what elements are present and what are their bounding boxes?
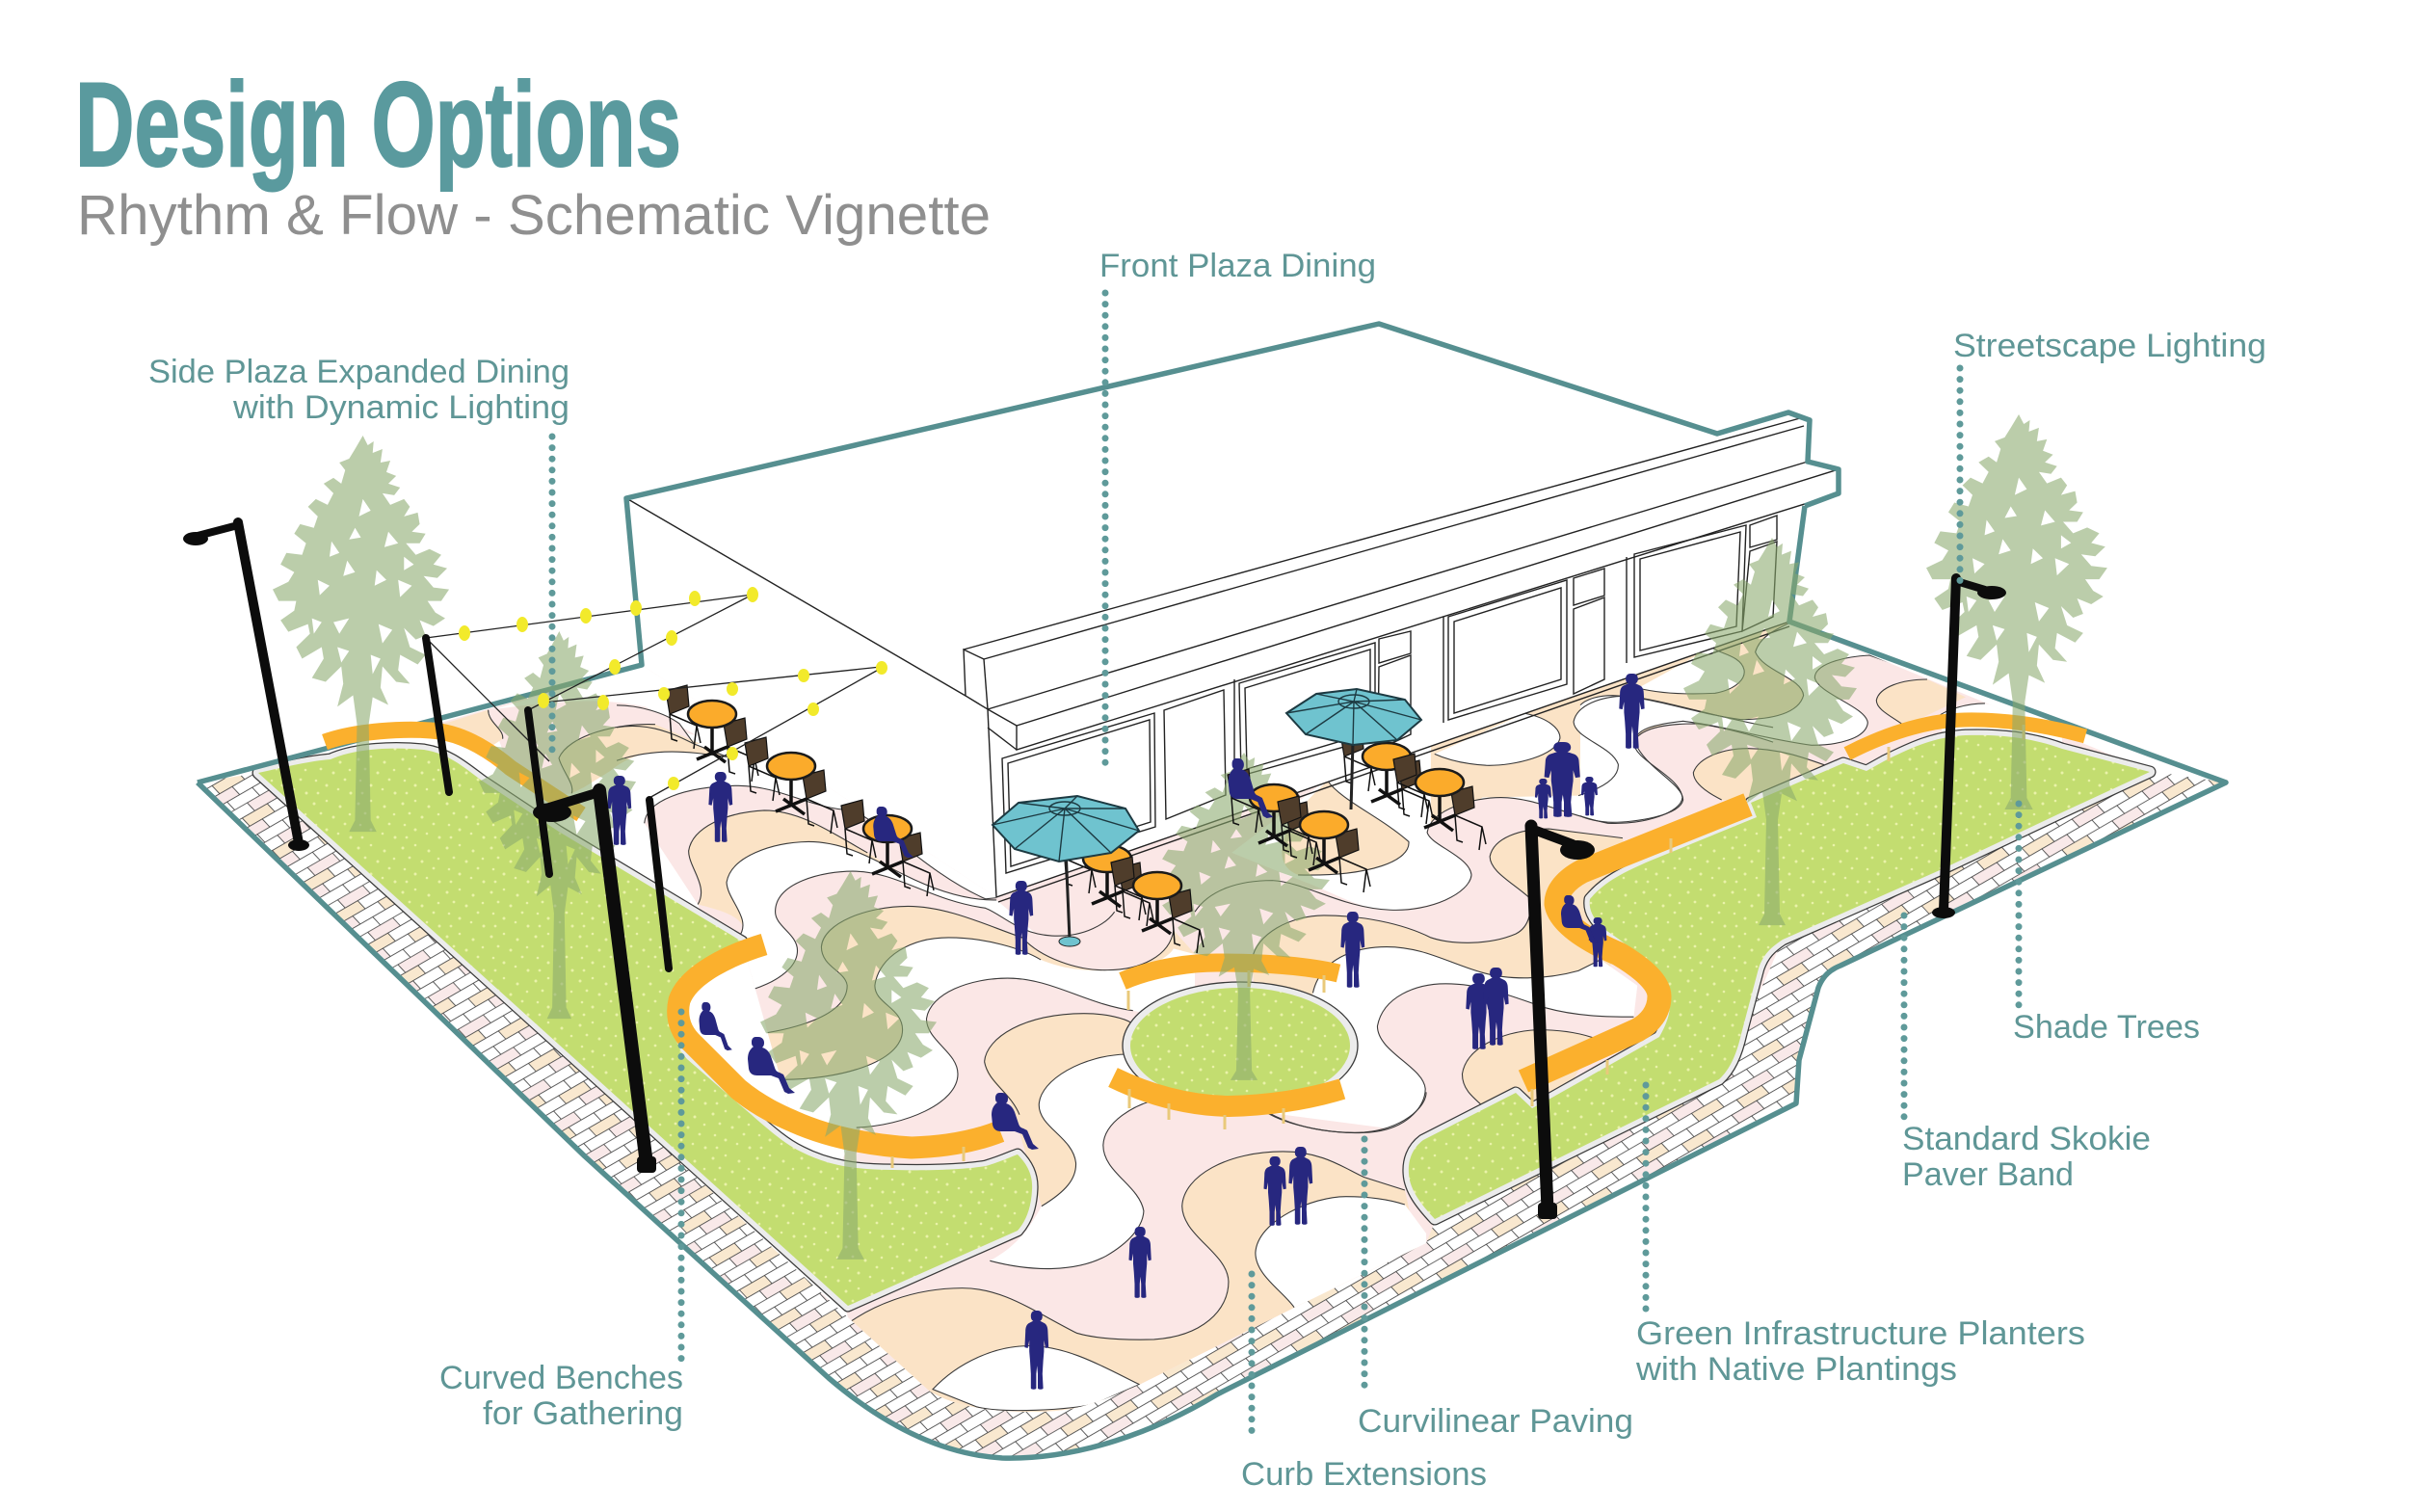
label: side plaza: with Dynamic Lighting	[232, 389, 569, 426]
label: shade trees: Shade Trees	[2013, 1009, 2200, 1046]
shade trees	[273, 414, 2107, 1260]
bench: side plaza back	[325, 729, 581, 814]
bench: circle top	[1123, 963, 1338, 981]
lamp: left front	[533, 790, 656, 1173]
label: paver band: Standard Skokie	[1902, 1121, 2151, 1157]
bench legs	[892, 725, 2024, 1168]
label: side plaza	[148, 354, 569, 752]
label: paver band	[1902, 915, 2151, 1193]
label: curved benches	[439, 1012, 683, 1432]
teal site and building outline	[198, 324, 2226, 1458]
tree: right planter	[1683, 538, 1857, 925]
building	[626, 418, 1839, 902]
paver band	[198, 771, 2226, 1458]
bench: circle bottom	[1113, 1077, 1342, 1106]
label: curb extensions: Curb Extensions	[1241, 1456, 1487, 1493]
label: streetscape lighting: Streetscape Lighting	[1953, 328, 2266, 364]
label: green infrastructure: Green Infrastructure Planters	[1636, 1315, 2085, 1352]
tree: front plaza left	[760, 871, 937, 1260]
tree: back left	[273, 436, 449, 832]
label: paver band: Paver Band	[1902, 1156, 2074, 1193]
benches	[325, 720, 2085, 1168]
planter: left green infrastructure	[258, 749, 1032, 1306]
label: green infrastructure: with Native Plantings	[1635, 1351, 1957, 1388]
title: Design Options	[75, 59, 681, 192]
plaza curvilinear paving	[442, 623, 2112, 1412]
umbrella: left	[993, 796, 1139, 946]
lamp: center front	[1531, 826, 1595, 1219]
label: front plaza dining: Front Plaza Dining	[1099, 248, 1376, 284]
people	[607, 674, 1645, 1390]
label: green infrastructure	[1635, 1085, 2085, 1388]
bench: front left curved	[678, 944, 1000, 1148]
bench: right top	[1847, 720, 2085, 754]
umbrella: right	[1286, 689, 1421, 809]
bench: right serpentine	[1523, 805, 1748, 1081]
lamp: far left	[183, 522, 309, 851]
label: side plaza: Side Plaza Expanded Dining	[148, 354, 569, 390]
subtitle: Rhythm & Flow - Schematic Vignette	[77, 184, 991, 247]
tree: central planter	[1154, 753, 1330, 1080]
lamp: right	[1932, 578, 2006, 918]
tree: side plaza	[479, 631, 636, 1019]
cafe tables and chairs	[666, 685, 1486, 953]
planter: right green infrastructure	[1409, 735, 2150, 1219]
paving contour lines	[489, 623, 1985, 1411]
label: curved benches: Curved Benches	[439, 1360, 683, 1396]
label: curved benches: for Gathering	[483, 1395, 683, 1432]
tree: far right	[1926, 414, 2107, 809]
label: curvilinear paving: Curvilinear Paving	[1358, 1403, 1633, 1440]
planter: central circular	[1123, 982, 1358, 1109]
string lighting	[426, 587, 887, 968]
